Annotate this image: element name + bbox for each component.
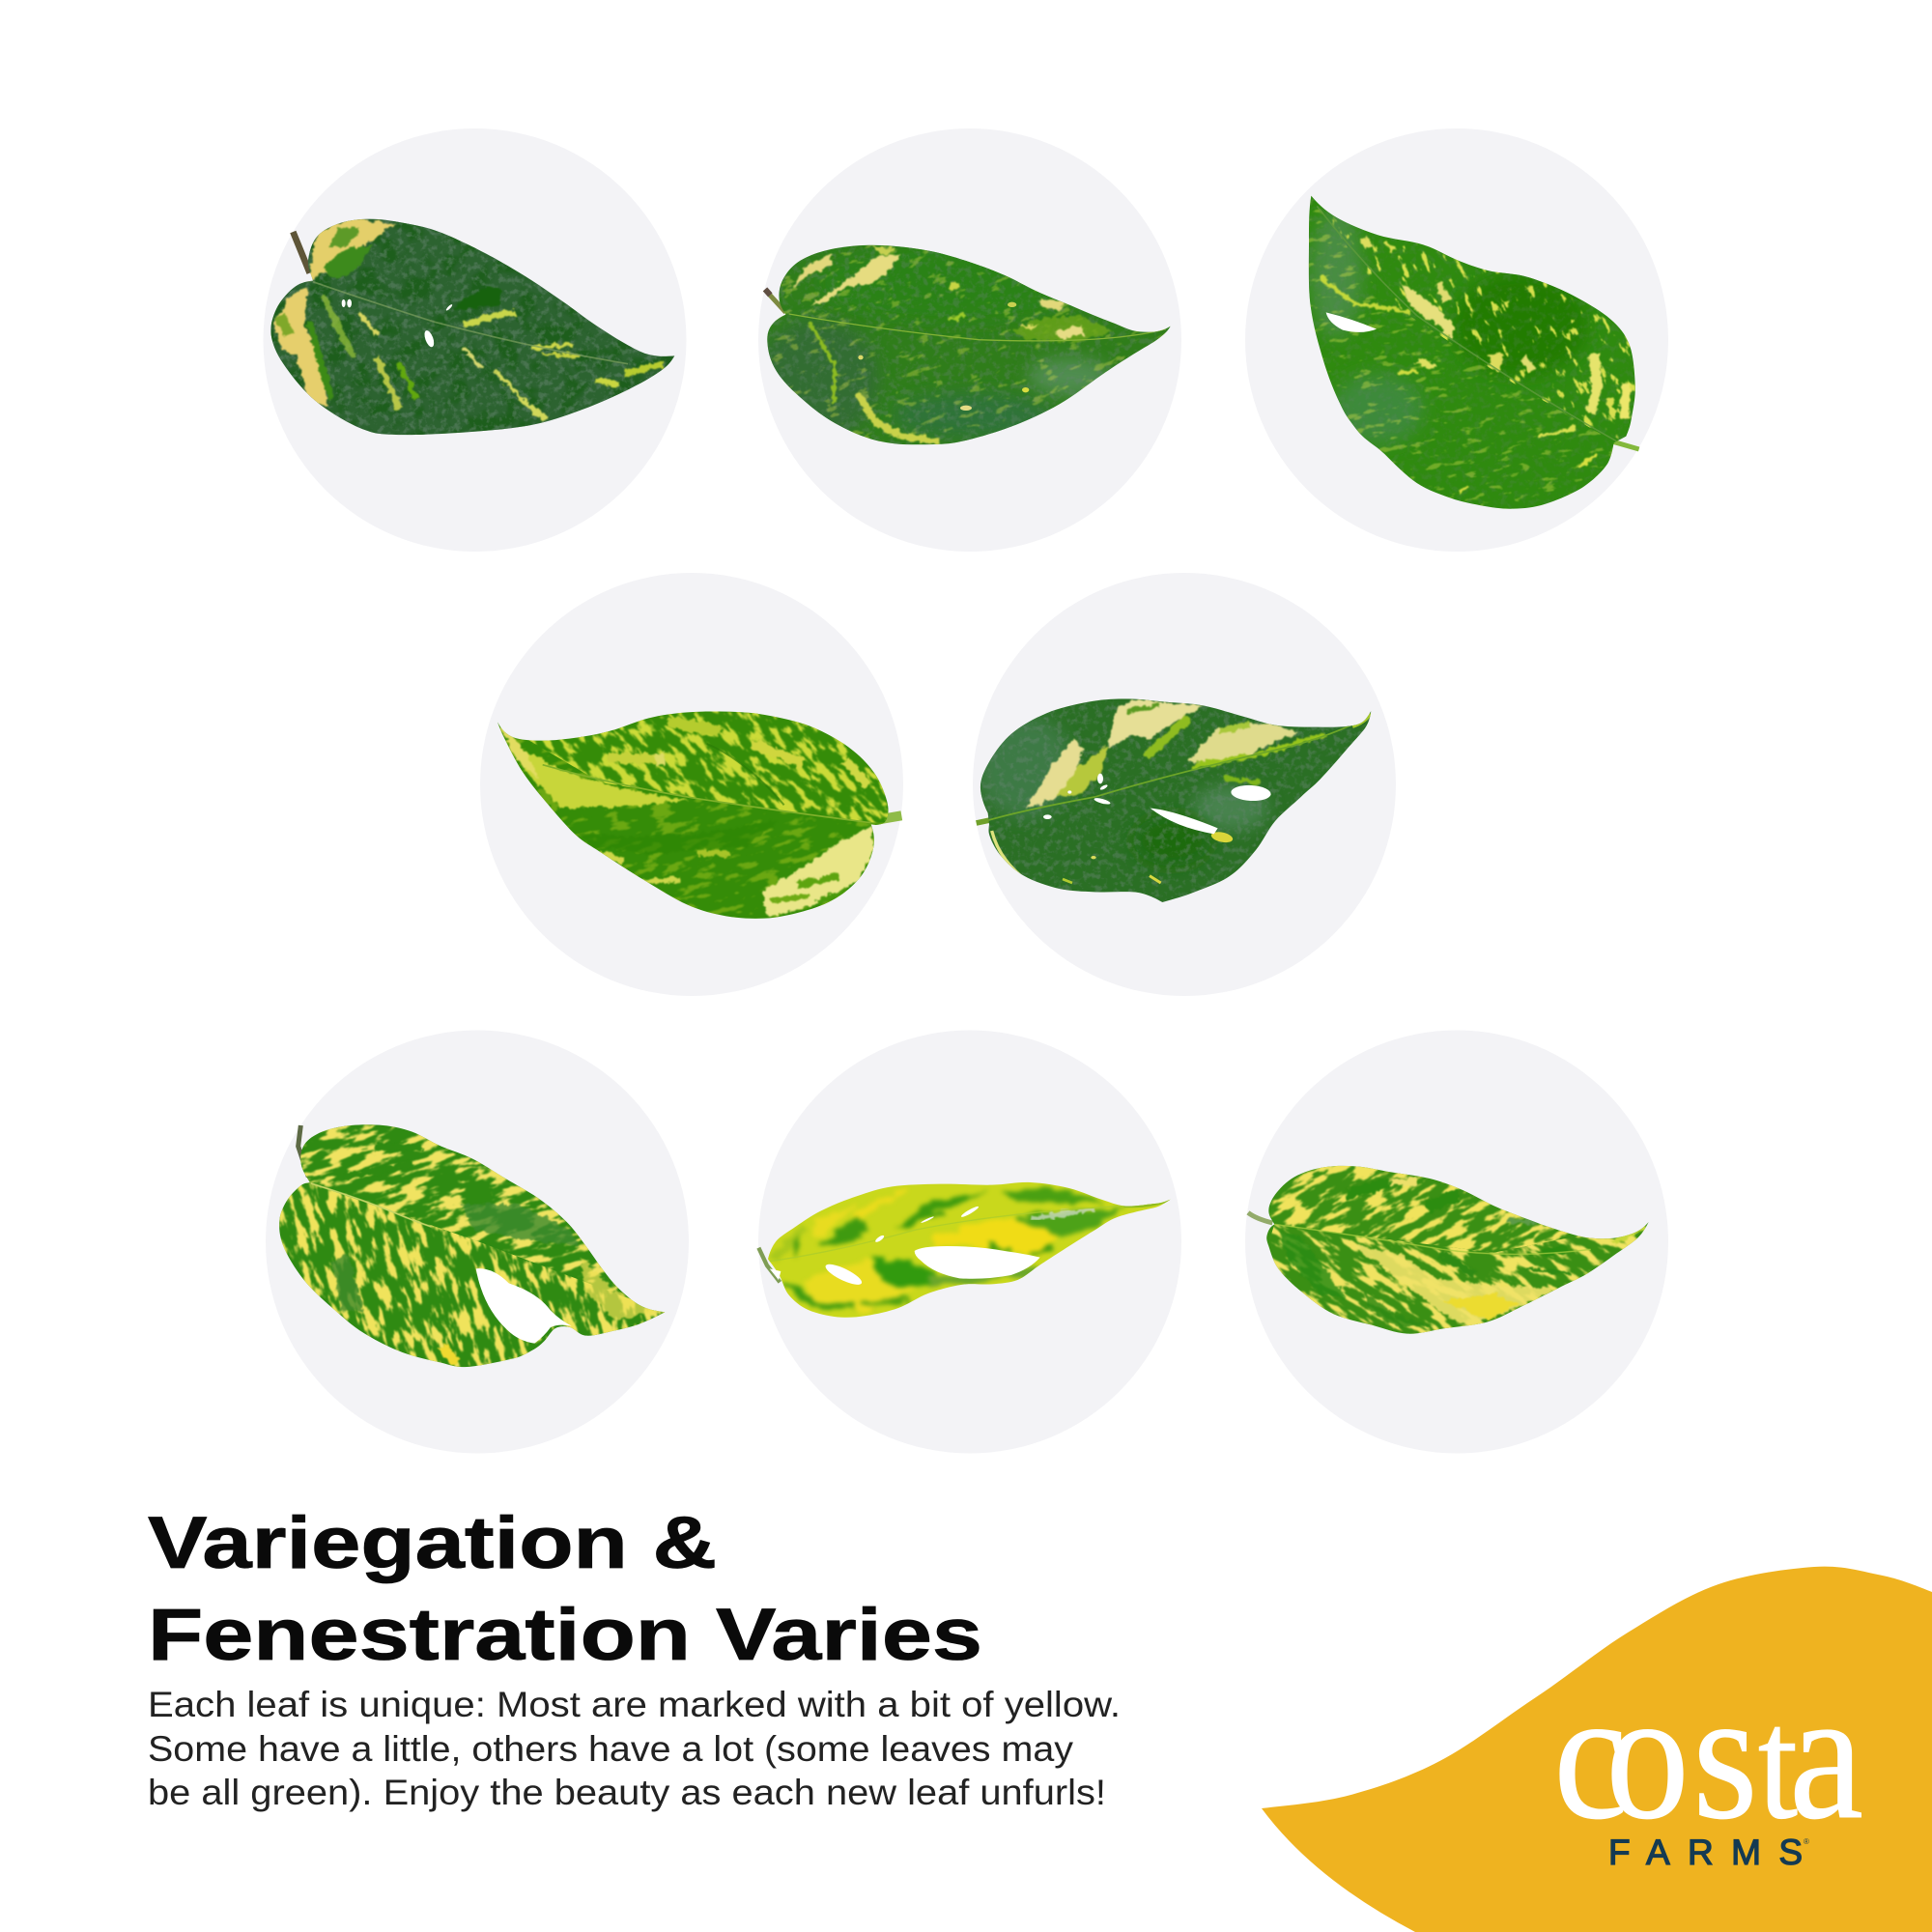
leaf photo 3: bright green with yellow speckles and a hole [789,195,1640,509]
body text: Each leaf is unique: Most are marked with a bit of yellow. [148,1685,1121,1724]
panel: leaf 2 [758,128,1369,552]
body text [148,1685,1121,1812]
leaf photo 1: dark green with yellow base [270,218,674,435]
title: Fenestration Varies [148,1594,982,1676]
circle backdrop 2 [758,128,1181,552]
leaf photo 4: mottled green with cream lower lobe [497,711,902,919]
title: Variegation & [148,1502,717,1584]
body text: be all green). Enjoy the beauty as each new leaf unfurls! [148,1773,1106,1812]
leaf photo 2: mid green with sparse yellow [763,245,1369,444]
leaf photo 5: dark green with cream bands and holes [976,698,1372,902]
logo: costa farms: FARMS [1608,1833,1803,1872]
panel: leaf 3 [789,128,1668,552]
leaf photo 6: heavily mottled yellow and green with a large hole [279,1124,1648,1368]
circle backdrop 5 [973,573,1396,996]
panel: leaf 8 [475,1030,1668,1453]
circle backdrop 1 [263,128,686,552]
panel: leaf 5 [973,573,1396,996]
circle backdrop 8 [1245,1030,1668,1453]
panel: leaf 7 [753,1030,1181,1453]
yellow brand swoosh [1262,1567,1932,1932]
circle backdrop 7 [758,1030,1181,1453]
title [148,1502,982,1676]
logo: costa farms: ® [1804,1837,1809,1846]
panel: leaf 1 [263,128,686,552]
leaf photo 8: yellow and green marbled leaf [475,1165,1648,1334]
circle backdrop 3 [1245,128,1668,552]
circle backdrop 6 [266,1030,689,1453]
leaf photo 7: lime yellow with large fenestrations [753,1169,1179,1333]
logo: costa farms: costa [1553,1652,1863,1858]
panel: leaf 4 [480,573,903,996]
circle backdrop 4 [480,573,903,996]
panel: leaf 6 [266,1030,1648,1453]
body text: Some have a little, others have a lot (some leaves may [148,1729,1074,1769]
